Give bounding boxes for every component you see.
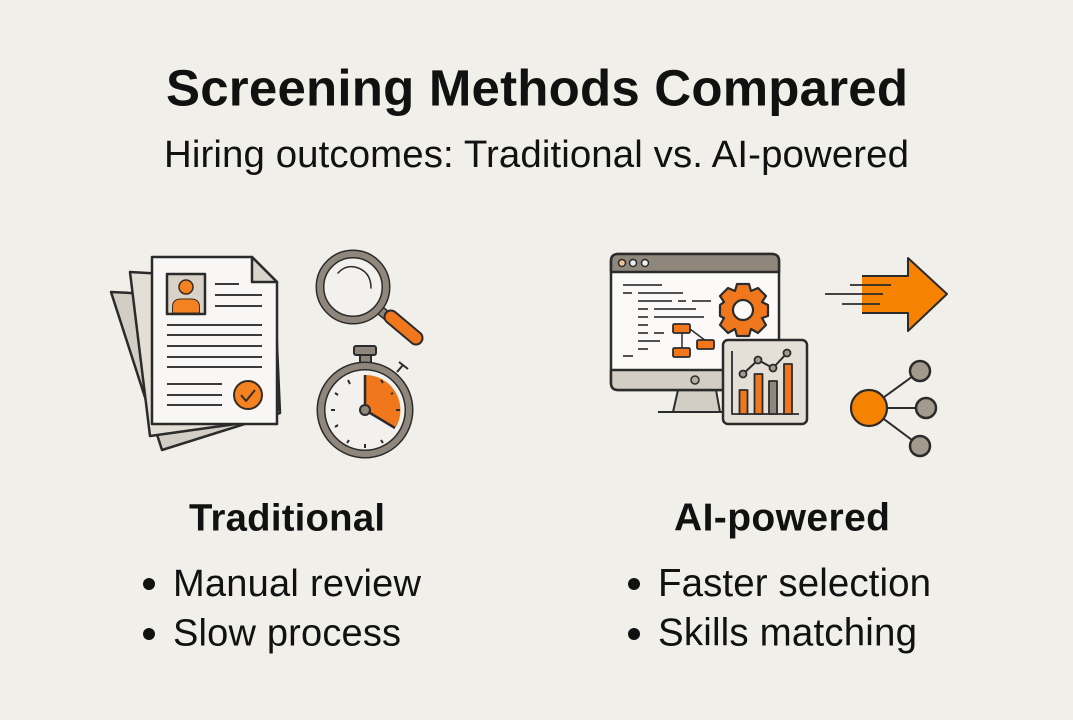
icon: gear	[720, 284, 768, 336]
panel: traditional	[111, 254, 422, 654]
icon: stopwatch	[321, 346, 409, 454]
chart card	[723, 340, 807, 424]
subtitle: Hiring outcomes: Traditional vs. AI-powered	[164, 133, 909, 176]
panel: ai-powered	[611, 254, 947, 654]
icon: magnifying glass	[320, 254, 416, 338]
icon: resume stack	[111, 257, 280, 450]
heading: ai-powered: AI-powered	[674, 496, 890, 540]
icon: network nodes	[851, 361, 936, 456]
icon: monitor dashboard	[611, 254, 807, 424]
title: Screening Methods Compared	[166, 60, 908, 116]
list: traditional: Manual review	[173, 563, 422, 605]
list: traditional	[143, 563, 422, 654]
list: ai-powered: Skills matching	[658, 612, 917, 654]
list: ai-powered: Faster selection	[658, 562, 931, 605]
icon: flow diagram	[673, 324, 714, 357]
list: traditional: Slow process	[173, 612, 401, 654]
list: ai-powered	[628, 562, 931, 654]
heading: traditional: Traditional	[189, 496, 385, 540]
icon: speed arrow	[825, 258, 947, 331]
